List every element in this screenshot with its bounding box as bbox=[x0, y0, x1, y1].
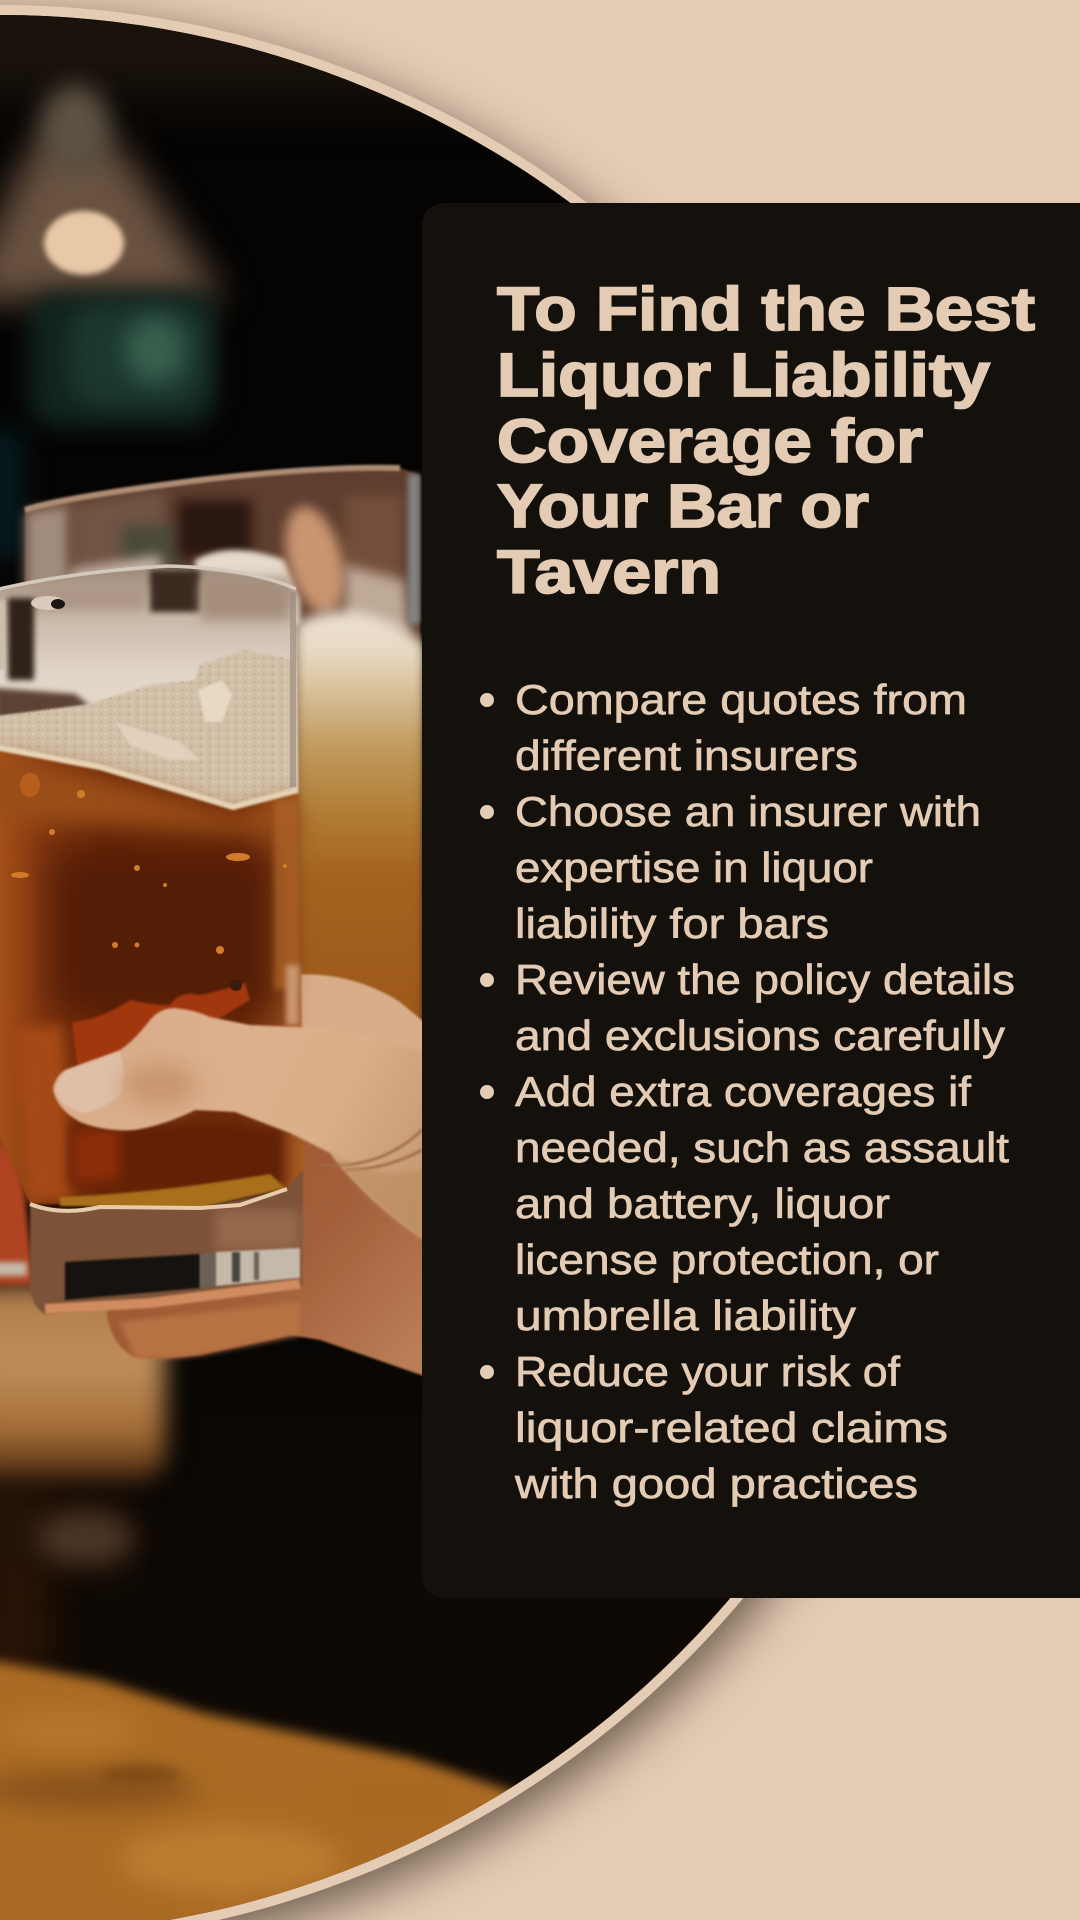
heading: Coverage for bbox=[497, 407, 923, 475]
heading: Liquor Liability bbox=[497, 341, 990, 409]
bullet: compare quotes: different insurers bbox=[515, 732, 858, 779]
front glass bbox=[0, 566, 304, 1314]
left edge red skin bbox=[0, 1138, 32, 1288]
panel background bbox=[422, 203, 1080, 1598]
glass interior detail bbox=[0, 570, 290, 722]
bullet: add extra coverages: license protection, or bbox=[515, 1236, 939, 1283]
thumbnail bbox=[55, 1052, 124, 1113]
blurred bottle reflection bbox=[37, 1512, 133, 1564]
bullet: compare quotes: Compare quotes from bbox=[515, 676, 967, 723]
heading: Your Bar or bbox=[497, 472, 869, 540]
back glass bbox=[25, 468, 425, 1040]
bullet: review the policy bbox=[480, 956, 1015, 1059]
foam bbox=[0, 650, 298, 807]
foam clearing bbox=[198, 680, 232, 722]
heading: Tavern bbox=[497, 538, 721, 606]
glass above foam bbox=[0, 568, 298, 790]
thumb across the glass bbox=[53, 1008, 424, 1240]
red refraction band bbox=[71, 982, 251, 1066]
bullet: choose an insurer: Choose an insurer with bbox=[515, 788, 981, 835]
bullet: add extra coverages: Add extra coverages if bbox=[515, 1068, 971, 1115]
thumb shading bbox=[122, 1063, 198, 1107]
beer bbox=[0, 747, 304, 1206]
bullet: add extra coverages: needed, such as assault bbox=[515, 1124, 1009, 1171]
glass rim bbox=[0, 566, 296, 590]
photo backdrop bbox=[0, 0, 760, 1920]
bullet: reduce your risk: liquor-related claims bbox=[515, 1404, 948, 1451]
heading: To Find the Best bbox=[497, 275, 1035, 343]
bullet: review the policy: Review the policy details bbox=[515, 956, 1015, 1003]
photo: two beer glasses in a toast bbox=[0, 0, 760, 1920]
glass base bbox=[30, 1170, 303, 1314]
bullet: add extra coverages: umbrella liability bbox=[515, 1292, 856, 1339]
heading bbox=[497, 275, 1035, 606]
panel: dark content card bbox=[422, 203, 1080, 1598]
bullet: compare quotes bbox=[480, 676, 967, 779]
bullet: choose an insurer: liability for bars bbox=[515, 900, 829, 947]
beer droplets bbox=[11, 773, 287, 991]
blurred skin shape bbox=[0, 1285, 165, 1480]
blurred green sign bbox=[30, 292, 215, 427]
bullet: add extra coverages: and battery, liquor bbox=[515, 1180, 890, 1227]
wooden table bbox=[0, 1658, 520, 1920]
blurred pendant lamp bbox=[0, 84, 225, 300]
bullet: reduce your risk: with good practices bbox=[514, 1460, 918, 1507]
bullet: review the policy: and exclusions carefully bbox=[515, 1012, 1005, 1059]
hand behind glass bbox=[107, 974, 424, 1376]
bullet: reduce your risk bbox=[480, 1348, 948, 1507]
bullet: choose an insurer: expertise in liquor bbox=[515, 844, 873, 891]
foam line bbox=[0, 747, 298, 807]
bullet: reduce your risk: Reduce your risk of bbox=[515, 1348, 900, 1395]
bullet: add extra coverages bbox=[480, 1068, 1009, 1339]
bullet: choose an insurer bbox=[480, 788, 981, 947]
